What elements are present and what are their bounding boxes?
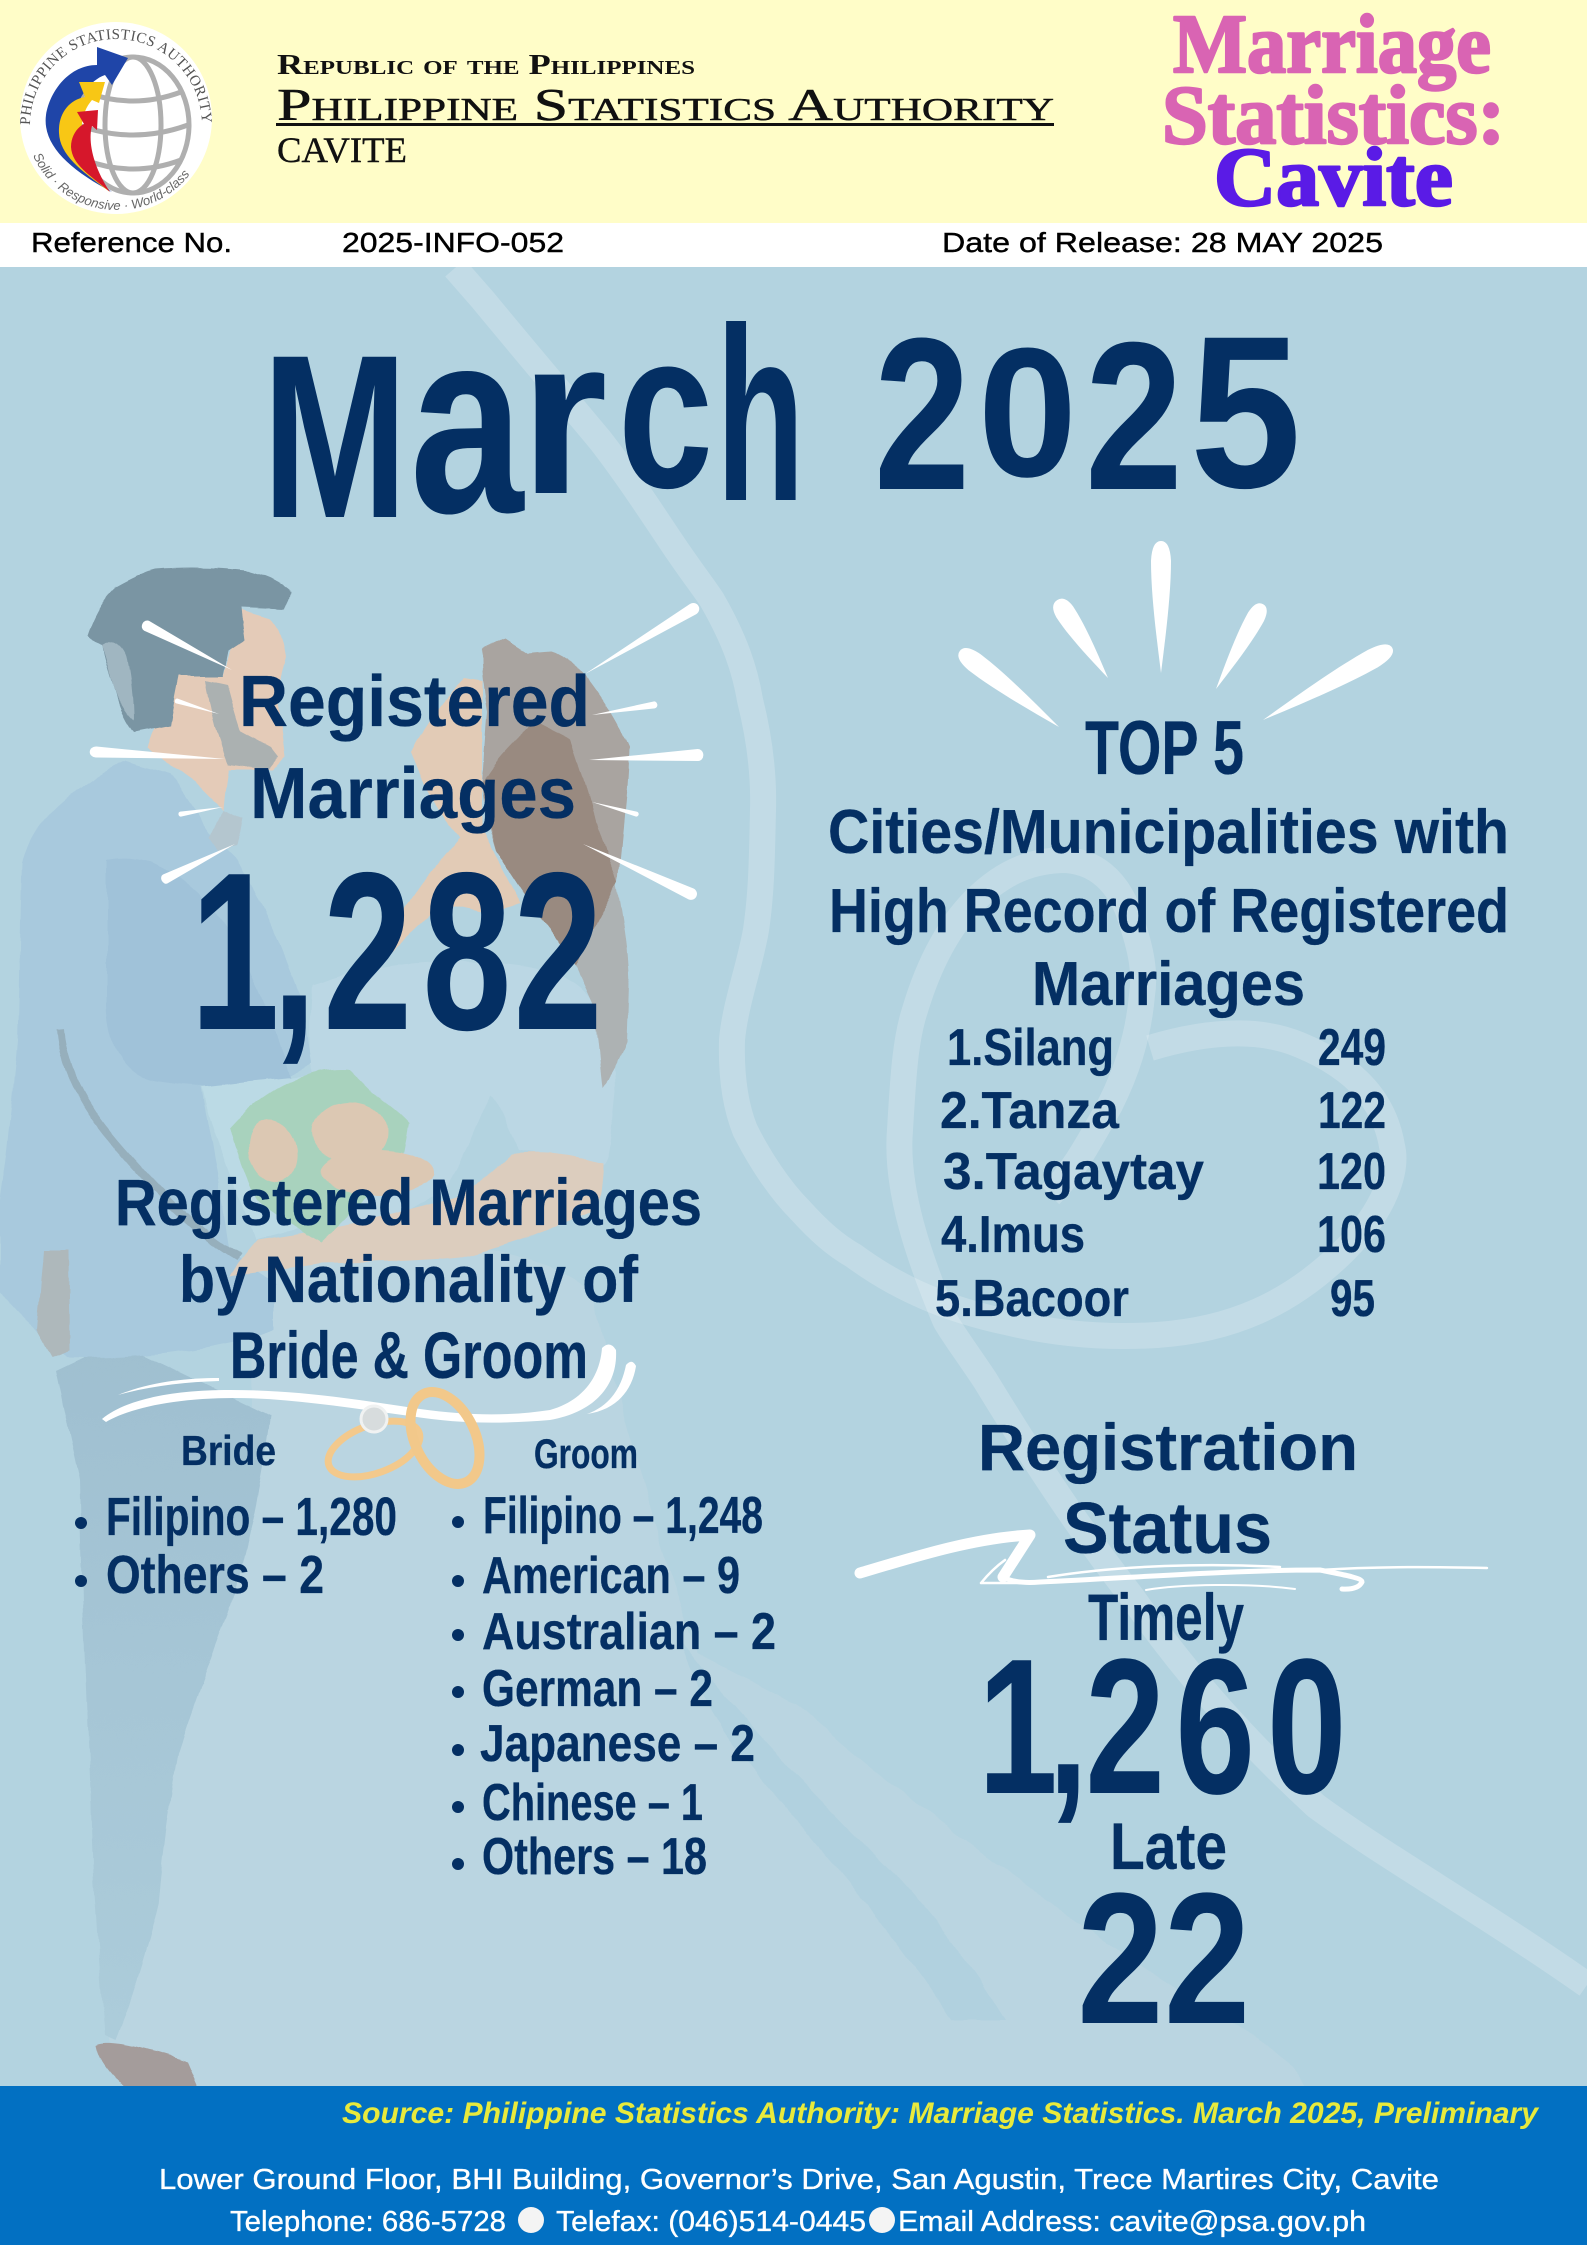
panel: nationality of bride and groom: by Nationality of (179, 1242, 639, 1316)
header band (0, 0, 1587, 223)
contact details: Telephone: 686-5728 (230, 2206, 506, 2238)
panel: registered marriages: Marriages (250, 754, 576, 834)
total value: 1,282 (190, 826, 603, 1077)
month heading: h (716, 277, 805, 552)
bride arm (230, 1153, 603, 1277)
bride column: Bride (181, 1427, 276, 1474)
groom jacket (0, 761, 312, 1358)
ranking list: 1.Silang (947, 1019, 1114, 1077)
groom column: American – 9 (482, 1547, 740, 1605)
groom column: German – 2 (482, 1660, 713, 1718)
groom hair (87, 568, 290, 732)
contact details: Email Address: cavite@psa.gov.ph (898, 2206, 1366, 2238)
contact details: Telefax: (046)514-0445 (556, 2206, 866, 2238)
agency underline (276, 123, 1054, 126)
groom collar (205, 680, 279, 770)
footer band (0, 2086, 1587, 2245)
reference band (0, 223, 1587, 267)
groom column: Chinese – 1 (482, 1774, 703, 1832)
footer text (159, 2097, 1539, 2238)
ranking list: 5.Bacoor (935, 1270, 1129, 1328)
month heading: a (410, 274, 526, 568)
ranking list: 120 (1317, 1143, 1386, 1201)
bride hair shading (482, 721, 618, 966)
groom sideburn highlight (103, 643, 134, 720)
title line: Statistics: Statistics: (1162, 69, 1505, 162)
reference number: 2025-INFO-052 (342, 227, 564, 258)
burst rays (89, 601, 704, 902)
month heading (262, 274, 1301, 568)
bride bodice (310, 961, 616, 1250)
bride skirt (108, 1238, 1310, 2095)
province: CAVITE (277, 130, 407, 170)
groom face (147, 609, 286, 810)
groom column: Groom (534, 1430, 638, 1477)
burst rays (954, 541, 1397, 735)
title line: Marriage: Marriage (1173, 0, 1491, 91)
agency header text (276, 49, 1054, 170)
bride column: Filipino – 1,280 (106, 1487, 397, 1547)
panel: registration status: Status (1063, 1489, 1272, 1569)
ranking list: 122 (1318, 1082, 1386, 1140)
seal motto: Solid · Responsive · World-class (34, 154, 189, 210)
bride hair tail (576, 881, 629, 1087)
yellow arrow (59, 82, 110, 192)
panel: top 5 cities: Marriages (1032, 950, 1305, 1019)
red arrow (71, 110, 110, 192)
background ribbon curves (455, 268, 1587, 1985)
heading: TOP 5 (1085, 706, 1244, 791)
groom column: Japanese – 2 (480, 1715, 755, 1773)
heading: Registration (978, 1410, 1358, 1484)
panel: top 5 cities: Cities/Municipalities with (828, 798, 1509, 867)
illustration: bride and groom watercolor (0, 568, 1310, 2095)
month heading: r (520, 290, 608, 541)
icon: wedding rings (321, 1381, 493, 1495)
bouquet wrap (202, 1075, 330, 1240)
month heading: c (618, 286, 713, 535)
ranking list: 4.Imus (941, 1206, 1085, 1264)
late label: Late (1110, 1809, 1227, 1883)
month heading: 2 (874, 292, 970, 535)
title line: Cavite: Cavite (1214, 131, 1453, 224)
contact details (230, 2206, 1366, 2238)
heading: Registered Marriages (115, 1165, 702, 1239)
seal text: PHILIPPINE STATISTICS AUTHORITY (20, 29, 212, 125)
ranking list: 2.Tanza (940, 1082, 1120, 1140)
republic line: Republic of the Philippines (277, 49, 695, 81)
timely label: Timely (1088, 1580, 1244, 1654)
bride column (75, 1427, 397, 1605)
logo: Philippine Statistics Authority seal (20, 22, 212, 214)
heading swoosh (102, 1344, 636, 1423)
ranking list: 249 (1318, 1019, 1386, 1077)
header title (1162, 0, 1505, 224)
month heading: 2 (1085, 299, 1183, 535)
groom shoe (96, 2043, 200, 2092)
bride column: Others – 2 (106, 1545, 324, 1605)
panel: nationality of bride and groom (75, 1165, 776, 1886)
ranking list: 95 (1330, 1270, 1375, 1328)
source note: Source: Philippine Statistics Authority: Marriage Statistics. March 2025, Preliminary (342, 2097, 1539, 2130)
agency name: Philippine Statistics Authority (277, 79, 1054, 130)
timely value: 1,260 (978, 1618, 1347, 1834)
globe (77, 57, 189, 193)
groom column: Filipino – 1,248 (483, 1487, 763, 1545)
panel: nationality of bride and groom: Bride & Groom (230, 1318, 588, 1392)
ranking list: 106 (1317, 1206, 1386, 1264)
ranking list (935, 1019, 1386, 1328)
reference label: Reference No. (31, 227, 232, 258)
panel: registered marriages (89, 601, 704, 1077)
heading swoosh (860, 1535, 1487, 1590)
groom trousers (56, 1342, 270, 2040)
bouquet flowers (242, 1102, 434, 1195)
blue arrow (46, 47, 128, 192)
bouquet leaves (230, 1069, 409, 1243)
reference info (31, 227, 1383, 258)
jacket seam (60, 1030, 239, 1257)
jacket hem strip (37, 1250, 70, 1357)
release date: Date of Release: 28 MAY 2025 (942, 227, 1383, 258)
skirt folds (680, 1640, 1005, 2020)
month heading: 5 (1190, 291, 1301, 534)
groom column (452, 1430, 776, 1886)
heading: Registered (239, 662, 590, 742)
groom cuff (210, 810, 243, 850)
bride skin (379, 680, 522, 962)
groom column: Others – 18 (482, 1828, 707, 1886)
bride hair (481, 638, 629, 966)
jacket shading (107, 858, 290, 1087)
groom column: Australian – 2 (482, 1603, 776, 1661)
panel: registration status (860, 1410, 1487, 2063)
panel: top 5 cities (828, 541, 1509, 1328)
late value: 22 (1077, 1855, 1250, 2063)
month heading: M (262, 306, 408, 567)
month heading: 0 (978, 310, 1077, 516)
ranking list: 3.Tagaytay (943, 1143, 1204, 1201)
address: Lower Ground Floor, BHI Building, Governor’s Drive, San Agustin, Trece Martires City, Cavite (159, 2164, 1439, 2196)
